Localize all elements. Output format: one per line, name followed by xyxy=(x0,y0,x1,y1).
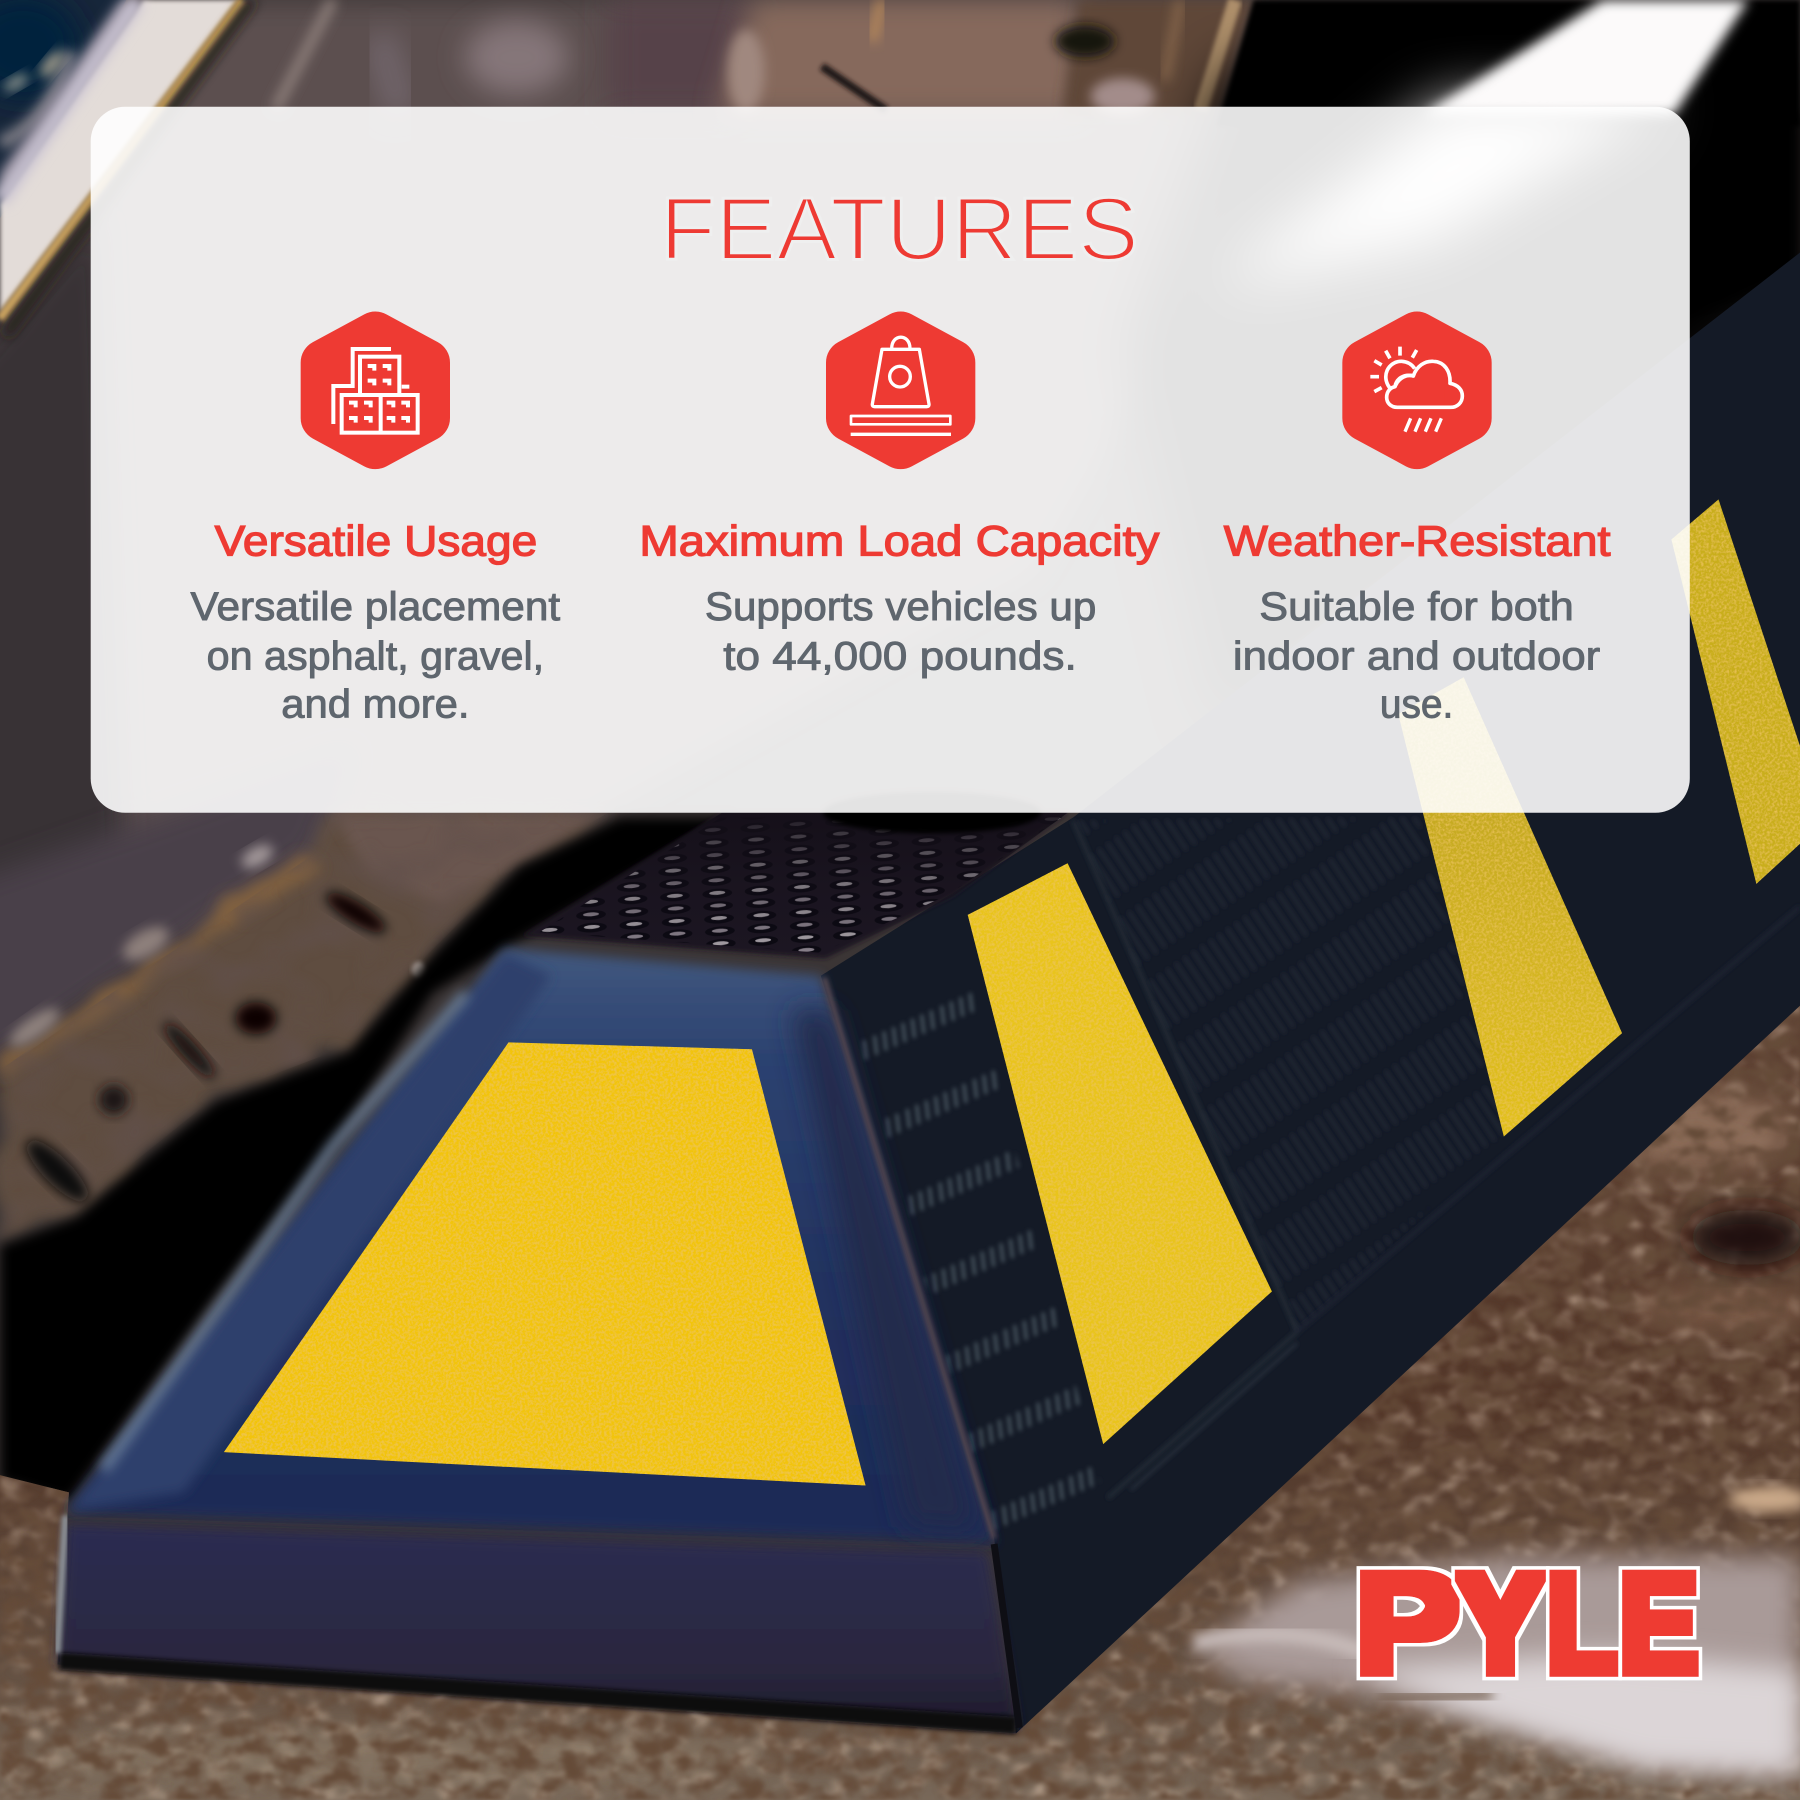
icon: weight on platform xyxy=(849,335,952,446)
background: wood strip lower left xyxy=(0,813,608,1240)
description: to 44,000 pounds. xyxy=(723,633,1077,678)
background: gravel light texture xyxy=(0,1006,1800,1800)
feature: weather resistant xyxy=(1224,335,1611,726)
description: Supports vehicles up xyxy=(705,584,1096,629)
yellow reflective panel: side two xyxy=(1398,677,1622,1136)
wheel stop: front face shading and bevel xyxy=(69,953,994,1538)
description xyxy=(1233,584,1600,726)
background: gravel dark texture xyxy=(0,1006,1800,1800)
yellow reflective panel: side three xyxy=(1671,499,1800,884)
feature: maximum load capacity xyxy=(639,335,1160,678)
background: dark left wall xyxy=(0,207,126,1010)
heading: Maximum Load Capacity xyxy=(639,518,1160,565)
logo: PYLE: E xyxy=(1620,1544,1698,1701)
wheel stop: blue front face xyxy=(67,948,996,1544)
description: Versatile placement xyxy=(191,584,560,629)
feature: versatile usage xyxy=(191,335,560,726)
background: black surface top right xyxy=(1125,0,1800,735)
wheel stop: ribbed side panel xyxy=(1073,817,1506,1332)
background: brown upper surface xyxy=(0,0,1257,987)
logo: PYLE: Y xyxy=(1458,1544,1543,1701)
icon: sun cloud rain xyxy=(1366,335,1468,446)
title: FEATURES xyxy=(660,178,1139,278)
logo: PYLE: L xyxy=(1547,1544,1616,1701)
background: tyre corner top left xyxy=(0,0,147,218)
description xyxy=(705,584,1096,678)
background: ground blotches xyxy=(23,1091,1800,1784)
card background xyxy=(91,107,1690,813)
wheel stop: hatched side strip xyxy=(855,976,1104,1544)
wheel stop: dark lower band xyxy=(57,1524,1019,1728)
description xyxy=(191,584,560,726)
heading: Weather-Resistant xyxy=(1224,518,1611,565)
yellow reflective panel: front xyxy=(224,1042,866,1485)
background: gravel ground xyxy=(0,1006,1800,1800)
description: and more. xyxy=(281,681,470,726)
icon: stacked buildings xyxy=(324,335,427,446)
logo: PYLE: P xyxy=(1355,1544,1460,1701)
wheel stop: lighter rim lines xyxy=(1073,821,1800,1498)
background: pale gravel patch xyxy=(1194,1557,1800,1774)
background: cream stripe xyxy=(0,0,253,335)
heading: Versatile Usage xyxy=(215,518,537,565)
logo: PYLE xyxy=(1355,1544,1698,1701)
wheel stop: side body xyxy=(821,253,1800,1733)
wheel stop: top perforated face xyxy=(522,792,1068,959)
yellow reflective panel: side one xyxy=(968,863,1272,1444)
background: white highlight top right xyxy=(1217,0,1748,287)
description: use. xyxy=(1380,681,1453,726)
panel: features card xyxy=(91,107,1690,813)
description: on asphalt, gravel, xyxy=(207,633,544,678)
background: muted grey wall above wood xyxy=(0,746,356,1085)
description: indoor and outdoor xyxy=(1233,633,1600,678)
background: black shadow xyxy=(0,817,735,1502)
description: Suitable for both xyxy=(1259,584,1574,629)
